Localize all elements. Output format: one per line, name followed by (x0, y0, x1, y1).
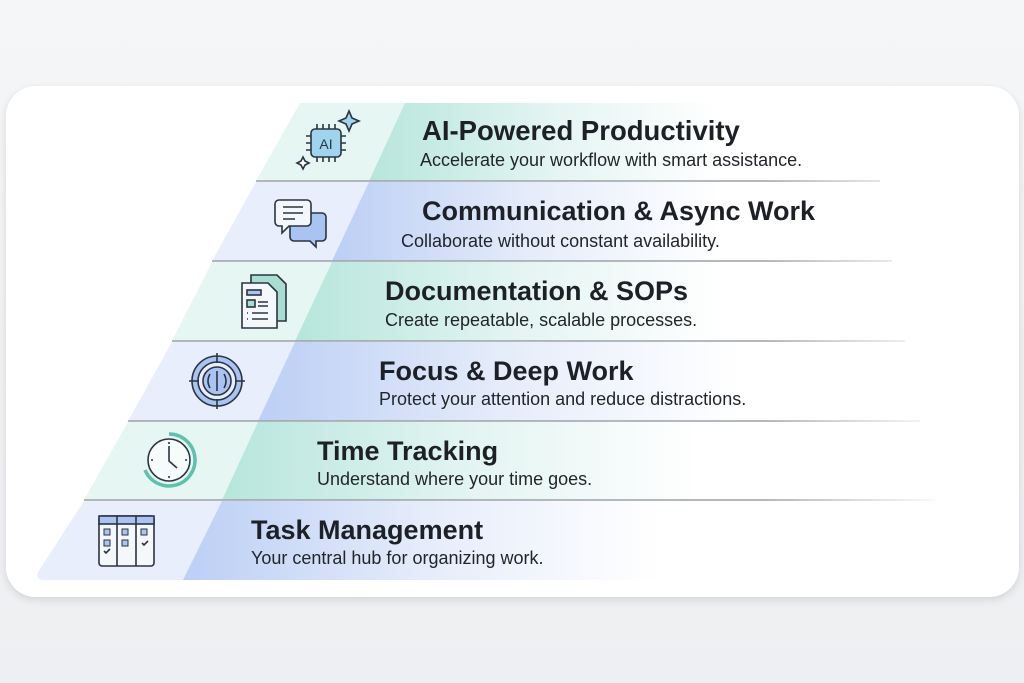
icon: AI chip: AI (319, 136, 333, 152)
icon: focus target brain (189, 353, 245, 409)
subtitle: Accelerate your workflow with smart assistance. (420, 150, 802, 170)
icon: task board (99, 516, 154, 566)
card (6, 86, 1019, 597)
layer: Task Management (37, 501, 950, 580)
subtitle: Protect your attention and reduce distractions. (379, 389, 746, 409)
layer: Time Tracking (84, 422, 935, 508)
subtitle: Understand where your time goes. (317, 469, 592, 489)
layer: Documentation & SOPs (172, 262, 905, 349)
layer: Focus & Deep Work (128, 342, 920, 429)
layer: Communication & Async Work (212, 182, 892, 269)
icon: documents (242, 275, 286, 328)
title: Focus & Deep Work (379, 356, 635, 386)
title: Time Tracking (317, 436, 498, 466)
icon: AI chip (297, 111, 359, 169)
icon: chat bubbles (275, 200, 326, 247)
title: Task Management (251, 515, 483, 545)
title: Communication & Async Work (422, 196, 816, 226)
title: AI-Powered Productivity (422, 115, 741, 146)
title: Documentation & SOPs (385, 276, 688, 306)
subtitle: Collaborate without constant availability. (401, 231, 720, 251)
subtitle: Your central hub for organizing work. (251, 548, 544, 568)
icon: clock (145, 434, 195, 486)
layer: AI-Powered Productivity (256, 103, 880, 189)
subtitle: Create repeatable, scalable processes. (385, 310, 697, 330)
